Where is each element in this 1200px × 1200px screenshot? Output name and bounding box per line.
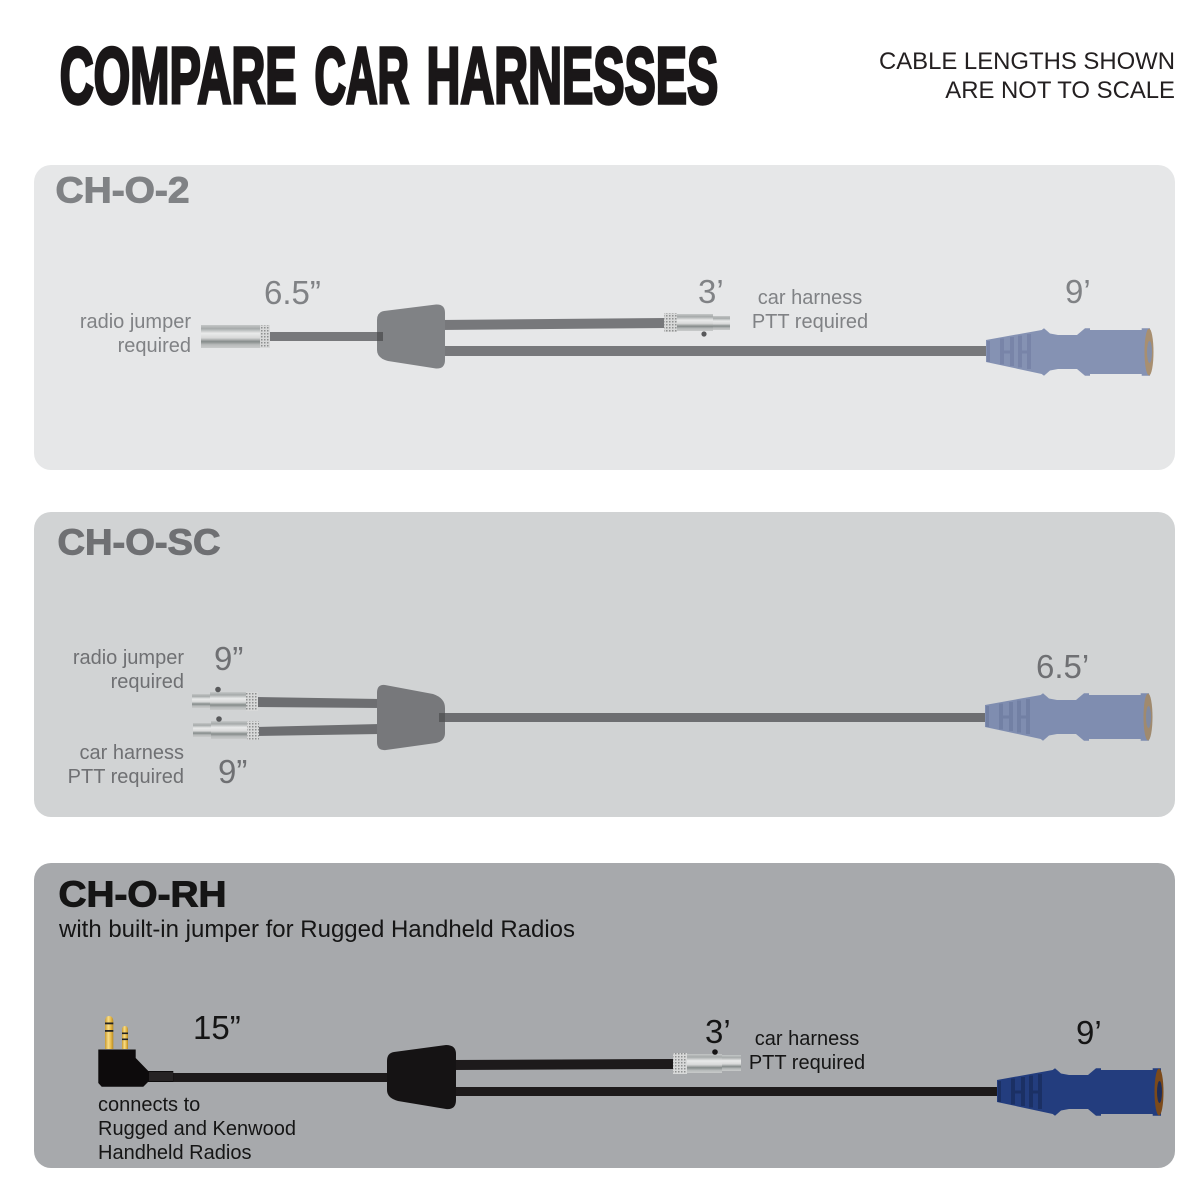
length: 15 inches: 15” xyxy=(193,1009,241,1046)
panel: CH-O-SC xyxy=(34,512,1175,817)
car harness label: PTT required xyxy=(749,1052,865,1074)
scale note xyxy=(879,48,1175,104)
PTT connector xyxy=(673,1049,741,1074)
cable overlap xyxy=(377,332,383,341)
heading: CH-O-SC: CH-O-SC xyxy=(58,522,221,562)
cables xyxy=(170,1059,999,1096)
subheading: with built-in jumper for Rugged Handheld Radios xyxy=(58,917,575,943)
panel: CH-O-RH xyxy=(34,863,1175,1168)
PTT connector xyxy=(664,313,730,337)
upper connector xyxy=(192,687,258,711)
cables xyxy=(256,697,988,736)
splitter xyxy=(377,685,445,750)
title: CAR xyxy=(314,31,409,120)
splitter xyxy=(377,304,445,369)
car harness label: car harness xyxy=(80,742,184,764)
radio jumper label: required xyxy=(118,335,191,357)
scale note: ARE NOT TO SCALE xyxy=(945,77,1175,104)
handheld radio label: Rugged and Kenwood xyxy=(98,1118,296,1140)
car harness label: PTT required xyxy=(752,311,868,333)
length: 9 inches top: 9” xyxy=(214,640,243,677)
handheld radio label xyxy=(98,1094,296,1164)
audio plug xyxy=(98,1016,173,1087)
scale note: CABLE LENGTHS SHOWN xyxy=(879,48,1175,75)
heading: CH-O-2: CH-O-2 xyxy=(56,170,190,210)
length: 6.5 feet: 6.5’ xyxy=(1036,648,1089,685)
headset connector xyxy=(997,1068,1164,1116)
splitter xyxy=(387,1045,456,1109)
radio jumper label: radio jumper xyxy=(73,647,184,669)
length: 3 feet: 3’ xyxy=(705,1013,731,1050)
title: HARNESSES xyxy=(426,31,718,120)
headset connector xyxy=(985,693,1152,741)
heading: CH-O-RH: CH-O-RH xyxy=(58,874,226,914)
length: 9 feet: 9’ xyxy=(1076,1014,1102,1051)
radio jumper label: radio jumper xyxy=(80,311,191,333)
car harness label xyxy=(752,287,868,333)
length: 9 feet: 9’ xyxy=(1065,273,1091,310)
length: 3 feet: 3’ xyxy=(698,273,724,310)
handheld radio label: Handheld Radios xyxy=(98,1142,251,1164)
panel: CH-O-2 xyxy=(34,165,1175,470)
title: COMPARE xyxy=(60,31,297,120)
length: 6.5 inches: 6.5” xyxy=(264,274,321,311)
car harness label xyxy=(68,742,184,788)
length: 9 inches bottom: 9” xyxy=(218,753,247,790)
radio jumper label xyxy=(73,647,184,693)
title xyxy=(60,31,718,120)
jumper connector xyxy=(201,325,270,348)
cables xyxy=(268,318,988,356)
cable overlap xyxy=(439,713,445,722)
car harness label: PTT required xyxy=(68,766,184,788)
handheld radio label: connects to xyxy=(98,1094,200,1116)
car harness label: car harness xyxy=(755,1028,859,1050)
car harness label xyxy=(749,1028,865,1074)
lower connector xyxy=(193,716,259,740)
radio jumper label: required xyxy=(111,671,184,693)
car harness label: car harness xyxy=(758,287,862,309)
headset connector xyxy=(986,328,1154,376)
radio jumper label xyxy=(80,311,191,357)
